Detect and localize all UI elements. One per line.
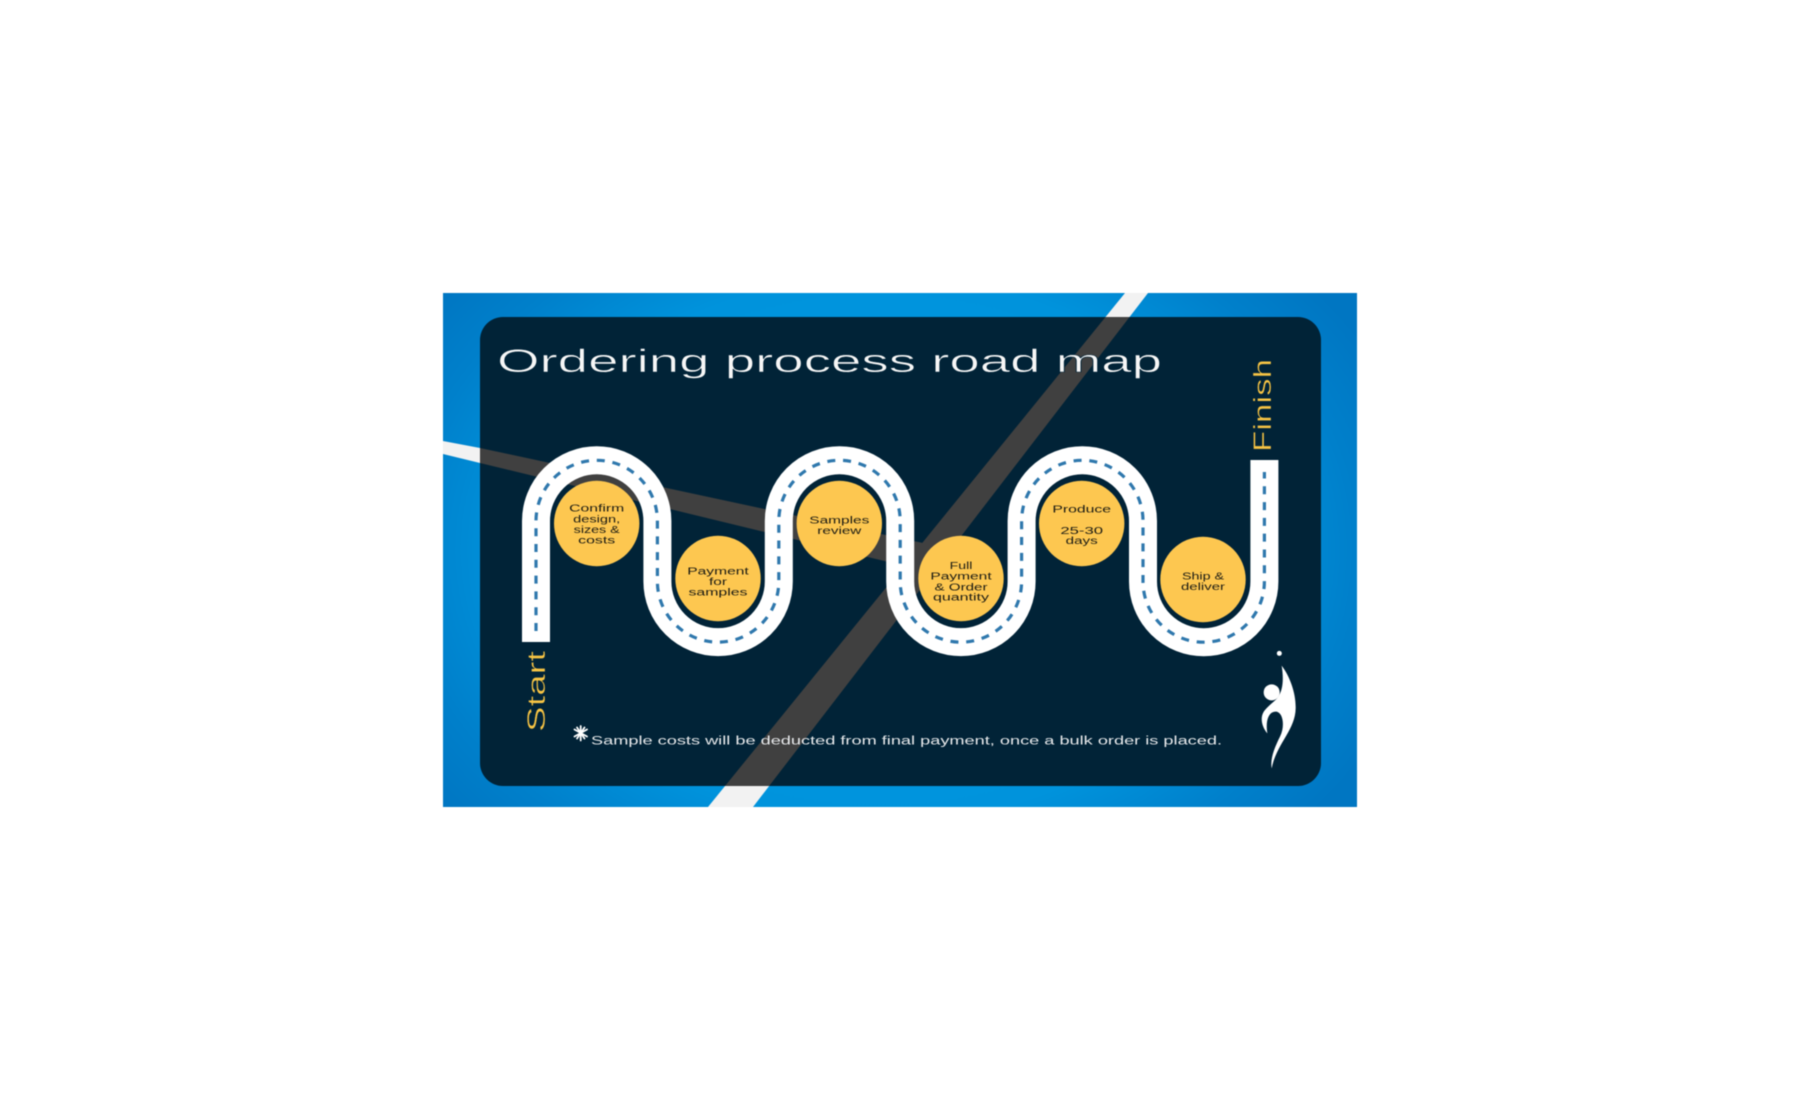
step 6: ship and deliver: deliver [1181,582,1226,593]
step 5: produce 25-30 days: Produce [1052,505,1112,516]
start label: Start [523,651,551,732]
step 3: samples review [797,481,882,566]
step 1: confirm design [554,481,639,566]
dark navy panel [480,317,1321,786]
step 1: confirm design: costs [578,536,615,547]
step 5: produce 25-30 days [1039,481,1124,566]
step 2: payment for samples: for [709,577,728,588]
grey streaks on panel [480,316,1130,786]
blue background card [443,293,1357,807]
title: Ordering process road map [497,343,1162,379]
step 5: produce 25-30 days: days [1066,536,1098,547]
step 1: confirm design: Confirm [569,504,624,515]
finish label: Finish [1249,359,1277,452]
step 6: ship and deliver [1160,537,1246,622]
step 2: payment for samples: samples [688,588,748,598]
white streaks on background [443,293,1148,807]
infographic [442,292,1358,808]
icon: leaping figure logo [1262,651,1296,768]
step 6: ship and deliver: Ship & [1182,571,1224,582]
step 5: produce 25-30 days: 25-30 [1060,526,1104,537]
step 4: full payment and order quantity: & Order [934,582,989,593]
step 3: samples review: review [817,526,862,537]
winding road [536,460,1264,642]
step 1: confirm design: design, [573,514,620,525]
step 1: confirm design: sizes & [574,525,620,536]
step 4: full payment and order quantity [918,536,1004,621]
step 3: samples review: Samples [809,515,869,526]
footnote: Sample costs will be deducted from final payment, once a bulk order is placed. [591,735,1222,747]
road centre dashes [536,460,1264,642]
asterisk icon [574,726,587,740]
step 2: payment for samples: Payment [687,566,749,577]
step 2: payment for samples [675,536,761,621]
step 4: full payment and order quantity: Full [950,561,972,572]
step 4: full payment and order quantity: quantity [933,593,989,604]
step 4: full payment and order quantity: Payment [930,572,992,583]
